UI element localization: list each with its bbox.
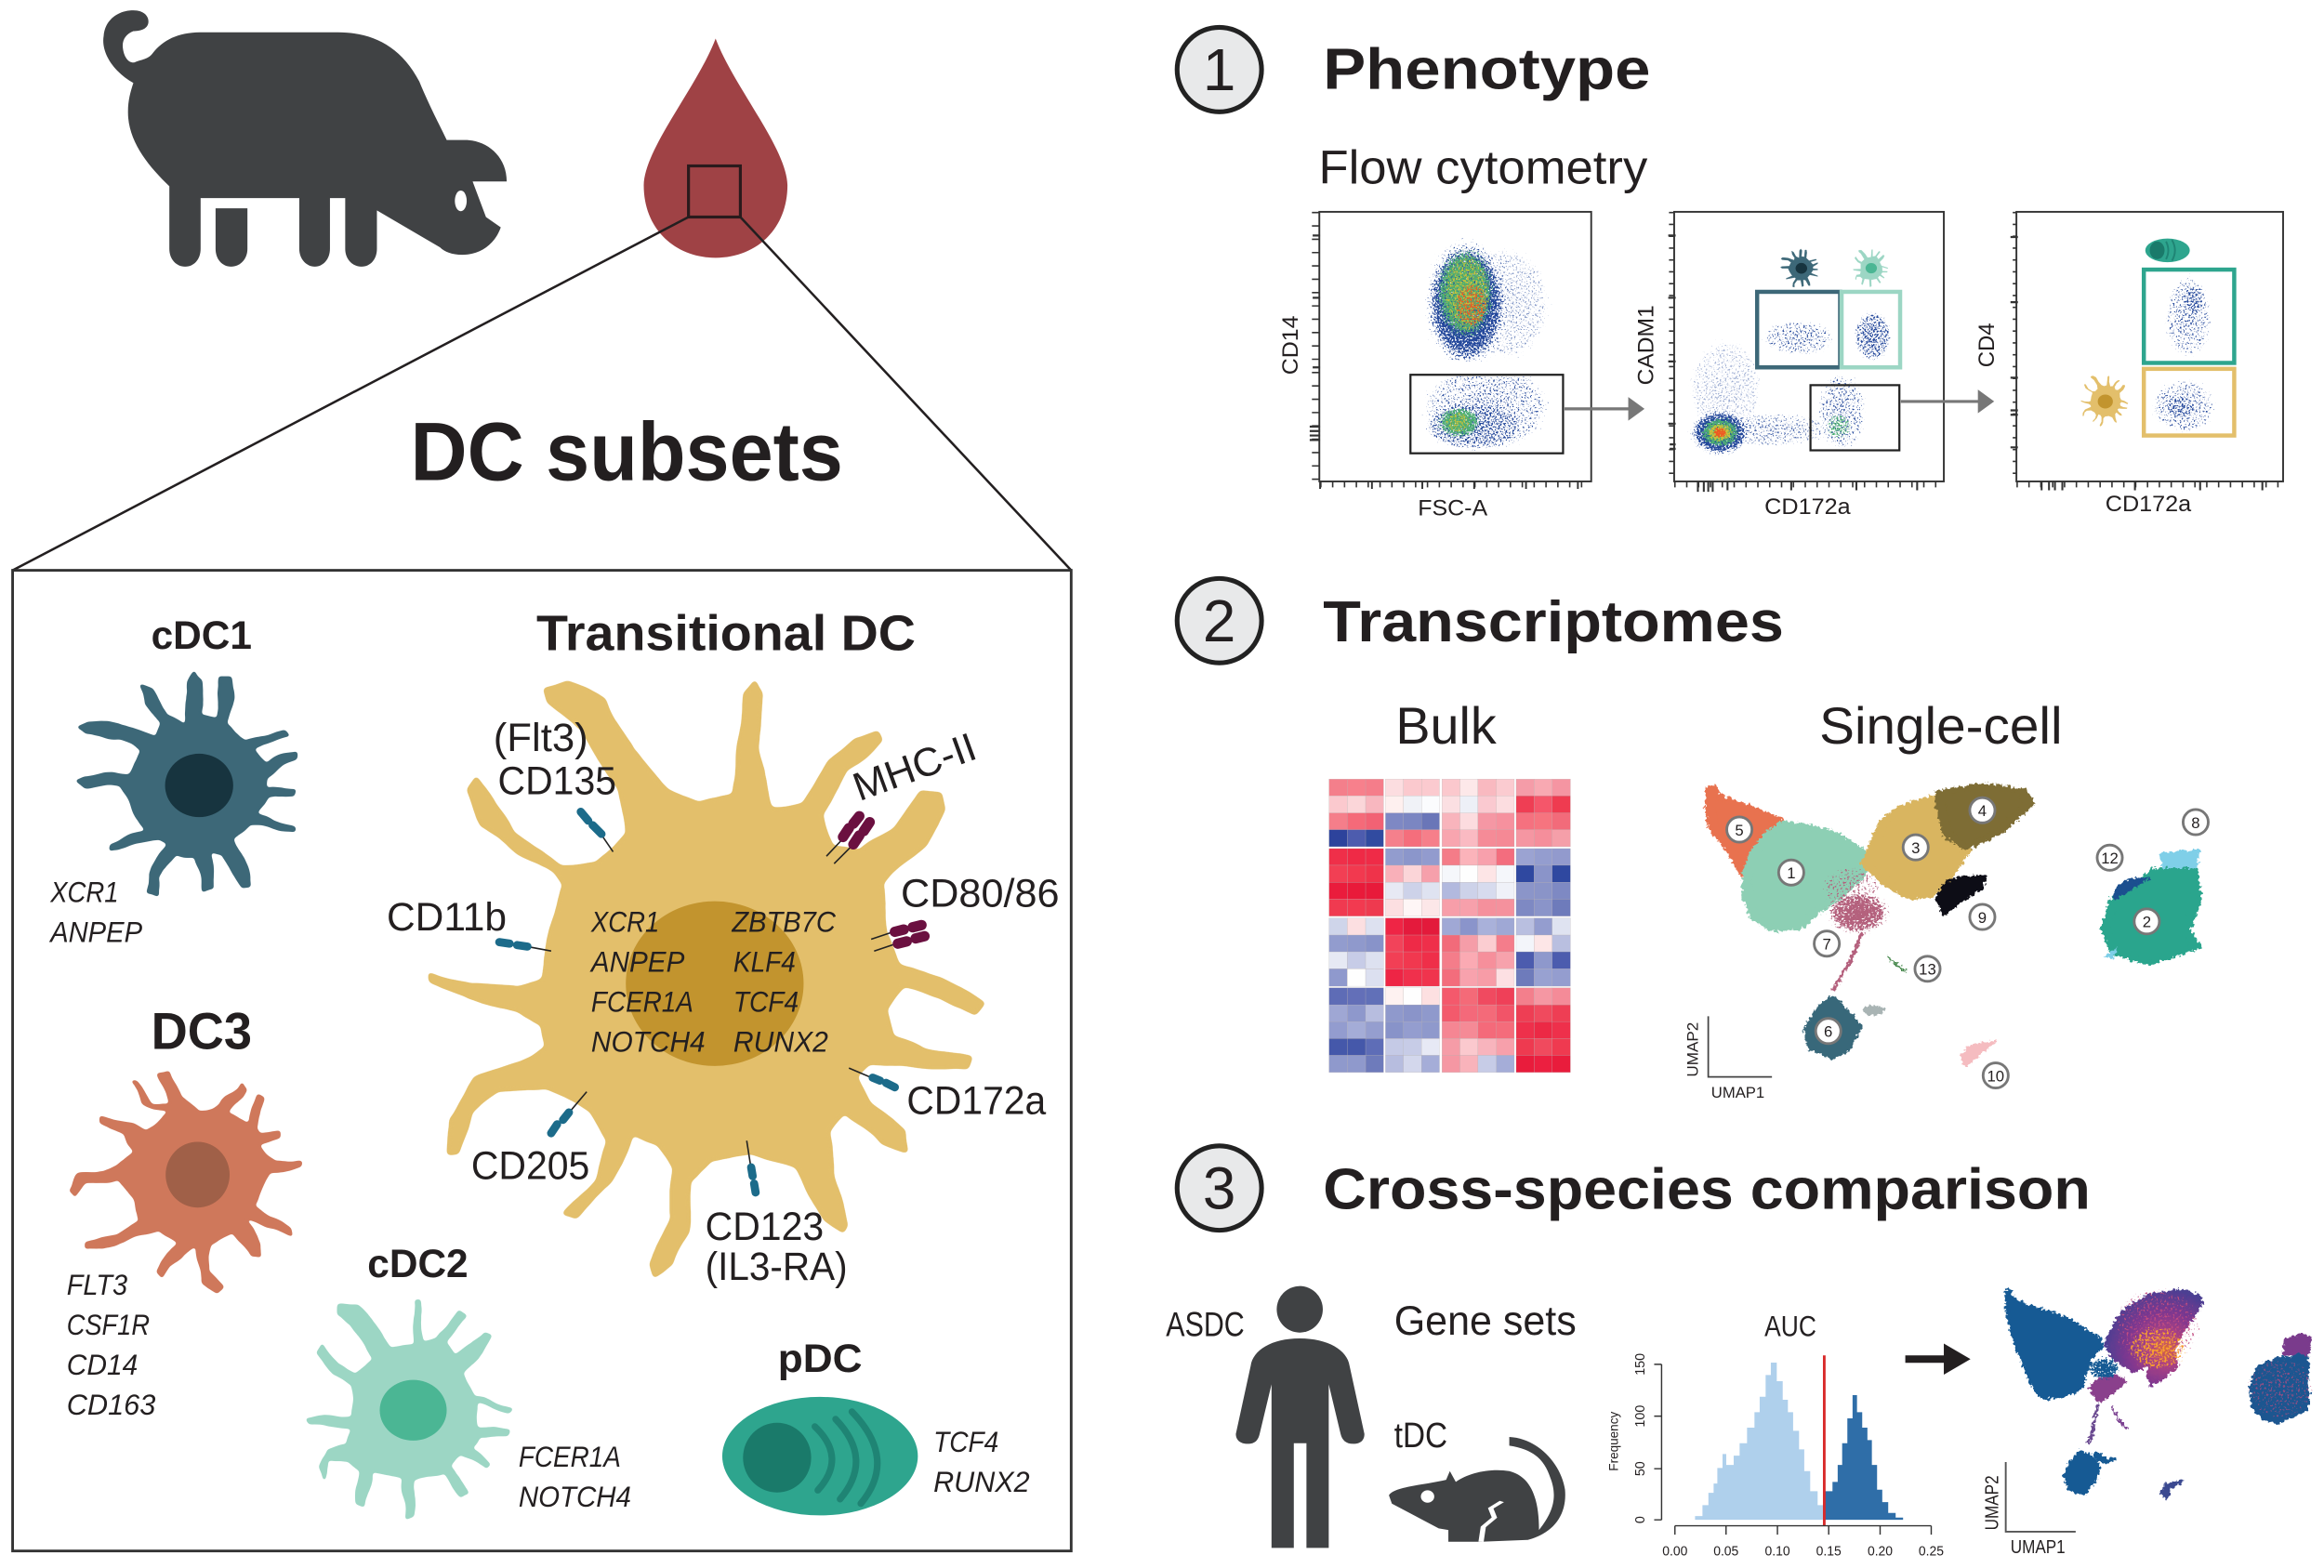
UMAP: cluster number badges xyxy=(1727,797,2209,1088)
x tick labels: 0.00 xyxy=(1662,1544,1687,1559)
label: CD205: CD205 xyxy=(471,1144,589,1189)
UMAP: cluster number badges: 9 xyxy=(1978,909,1987,927)
UMAP: cluster number badges: 3 xyxy=(1911,839,1920,857)
UMAP: cluster number badges: 6 xyxy=(1824,1023,1832,1041)
label: CD123 IL3-RA: (IL3-RA) xyxy=(706,1245,848,1289)
UMAP: cluster number badges: 8 xyxy=(2191,814,2200,832)
zoom lines xyxy=(13,217,1071,571)
axes xyxy=(1654,1364,1931,1535)
genes: cDC1 xyxy=(48,876,143,949)
x tick labels: 0.10 xyxy=(1765,1544,1790,1559)
badge: 1: 1 xyxy=(1203,36,1235,103)
icon: transitional DC small xyxy=(2081,376,2128,427)
badge: 3 xyxy=(1177,1146,1261,1231)
heading: cDC2: cDC2 xyxy=(367,1242,469,1286)
genes: transitional DC left: FCER1A xyxy=(591,985,693,1019)
icon: mouse xyxy=(1389,1437,1565,1542)
subheading: Bulk: Bulk xyxy=(1395,697,1497,755)
subheading: Single-cell: Single-cell xyxy=(1819,697,2063,755)
label: CD123 IL3-RA xyxy=(706,1205,848,1289)
genes: transitional DC left: ANPEP xyxy=(589,945,685,979)
x tick labels: 0.05 xyxy=(1713,1544,1738,1559)
icon: cDC2 cell xyxy=(307,1301,512,1520)
genes: pDC: TCF4 xyxy=(933,1425,998,1458)
y tick labels: 0 xyxy=(1633,1516,1648,1523)
UMAP axes: UMAP1 xyxy=(1711,1084,1764,1101)
label: CD11b: CD11b xyxy=(387,895,507,940)
genes: transitional DC right: KLF4 xyxy=(733,945,796,979)
genes: pDC xyxy=(933,1425,1030,1498)
y tick labels: 150 xyxy=(1633,1353,1648,1376)
threshold line xyxy=(1823,1355,1825,1526)
cell: DC3 xyxy=(67,1002,302,1421)
genes: DC3 xyxy=(67,1268,156,1421)
genes: transitional DC right: TCF4 xyxy=(733,985,799,1019)
x tick labels: 0.20 xyxy=(1868,1544,1893,1559)
UMAP axes overlay: UMAP2 xyxy=(1981,1475,2002,1530)
section 3: Cross-species comparison xyxy=(1166,1146,2321,1559)
genes: DC3: CD163 xyxy=(67,1388,156,1421)
label: Flt3 CD135 xyxy=(494,716,616,803)
label: AUC: AUC xyxy=(1764,1310,1816,1343)
icon: pDC small xyxy=(2146,239,2190,262)
icon: blood drop xyxy=(644,38,787,257)
UMAP: AUC overlay xyxy=(2006,1278,2321,1499)
genes: DC3: CSF1R xyxy=(67,1308,150,1341)
UMAP axes overlay xyxy=(1981,1462,2076,1558)
receptor: CD123 xyxy=(746,1140,756,1192)
heading: pDC: pDC xyxy=(778,1337,863,1381)
genes: transitional DC right: ZBTB7C xyxy=(731,904,837,938)
heatmap xyxy=(1329,779,1570,1073)
UMAP: cluster number badges: 13 xyxy=(1919,961,1936,979)
UMAP: clusters xyxy=(1710,785,2200,1065)
axis labels: CD4 xyxy=(1974,323,2000,367)
icon: DC3 cell xyxy=(70,1071,302,1292)
badge: 2: 2 xyxy=(1203,587,1235,654)
axis labels xyxy=(1974,323,2192,517)
UMAP axes overlay: UMAP1 xyxy=(2011,1536,2066,1558)
arrow: gate to plot 2 xyxy=(1565,397,1644,421)
axis labels: CD172a xyxy=(2106,492,2192,517)
zoom square on drop xyxy=(689,166,740,217)
label: MHC-II: MHC-II xyxy=(847,725,983,810)
gates xyxy=(2144,270,2234,436)
label: Flt3 CD135: (Flt3) xyxy=(494,716,588,760)
axis labels: FSC-A xyxy=(1418,496,1487,521)
y tick labels: 100 xyxy=(1633,1405,1648,1428)
section 2: Transcriptomes xyxy=(1177,578,2209,1101)
heading: DC3: DC3 xyxy=(152,1002,252,1060)
receptor: CD205 xyxy=(551,1092,587,1133)
UMAP: cluster number badges: 7 xyxy=(1822,936,1831,954)
subheading: Flow cytometry: Flow cytometry xyxy=(1318,141,1648,194)
axis labels xyxy=(1278,315,1487,521)
label: CD123 IL3-RA: CD123 xyxy=(706,1205,824,1249)
receptor: CD11b xyxy=(499,942,551,951)
axis labels xyxy=(1634,305,1851,520)
genes: transitional DC left: NOTCH4 xyxy=(591,1025,706,1059)
heading: cDC1: cDC1 xyxy=(152,613,252,658)
receptor: CD172a xyxy=(849,1068,895,1087)
badge: 2 xyxy=(1177,578,1261,663)
genes: transitional DC right: RUNX2 xyxy=(733,1025,828,1059)
label: CD172a: CD172a xyxy=(906,1079,1046,1124)
UMAP: cluster number badges: 10 xyxy=(1987,1067,2004,1085)
icon: cDC1 small xyxy=(1780,249,1817,287)
heading: Phenotype: Phenotype xyxy=(1323,38,1650,102)
arrow: gate to plot 3 xyxy=(1901,389,1994,414)
icon: pDC cell xyxy=(722,1397,918,1515)
axis labels: CD14 xyxy=(1278,315,1303,375)
genes: transitional DC right xyxy=(731,904,837,1059)
icon: cDC1 cell xyxy=(77,671,295,896)
flow plot 1 xyxy=(1278,212,1591,521)
UMAP: cluster number badges: 12 xyxy=(2101,850,2119,867)
label: Gene sets: Gene sets xyxy=(1394,1298,1577,1344)
label: CD80/86: CD80/86 xyxy=(901,871,1060,916)
heading: DC subsets: DC subsets xyxy=(410,404,843,497)
axis labels: CD172a xyxy=(1764,494,1851,520)
genes: cDC1: ANPEP xyxy=(48,916,143,949)
genes: cDC2: FCER1A xyxy=(519,1440,621,1473)
UMAP: cluster number badges: 2 xyxy=(2143,914,2151,931)
y tick labels: Frequency xyxy=(1606,1412,1620,1471)
cell: pDC xyxy=(722,1337,1030,1515)
heading: Transcriptomes: Transcriptomes xyxy=(1323,590,1784,654)
x tick labels: 0.15 xyxy=(1816,1544,1842,1559)
flow plot 3 xyxy=(1974,212,2283,517)
arrow: AUC to UMAP xyxy=(1906,1344,1971,1375)
heading: Transitional DC: Transitional DC xyxy=(536,606,916,662)
genes: cDC2 xyxy=(519,1440,631,1513)
icon: pig xyxy=(103,10,507,267)
genes: transitional DC left xyxy=(589,904,706,1059)
histogram xyxy=(1606,1353,1944,1559)
cell: cDC2 xyxy=(307,1242,631,1520)
badge: 3: 3 xyxy=(1203,1155,1235,1222)
x tick labels: 0.25 xyxy=(1919,1544,1944,1559)
gates xyxy=(1757,292,1900,451)
receptor: CD80/86 xyxy=(871,925,925,951)
icon: human xyxy=(1235,1286,1365,1548)
UMAP axes xyxy=(1684,1016,1772,1101)
UMAP: cluster number badges: 1 xyxy=(1787,864,1796,882)
heading: Cross-species comparison: Cross-species comparison xyxy=(1323,1158,2091,1222)
label: tDC: tDC xyxy=(1394,1416,1447,1456)
genes: DC3: CD14 xyxy=(67,1348,138,1381)
axis labels: CADM1 xyxy=(1634,305,1659,385)
y tick labels: 50 xyxy=(1633,1461,1648,1476)
cell: Transitional DC xyxy=(387,606,1060,1289)
flow plot 2 xyxy=(1634,212,1944,520)
section 1: Phenotype xyxy=(1177,27,2283,521)
receptor: CD135 xyxy=(581,811,614,851)
genes: cDC1: XCR1 xyxy=(49,876,119,909)
UMAP: cluster number badges: 5 xyxy=(1735,822,1744,839)
icon: cDC2 small xyxy=(1854,250,1888,287)
UMAP axes: UMAP2 xyxy=(1684,1022,1701,1077)
gate xyxy=(1410,375,1563,454)
panel: DC subsets box xyxy=(13,571,1071,1551)
label: ASDC: ASDC xyxy=(1166,1306,1245,1344)
genes: transitional DC left: XCR1 xyxy=(590,904,659,938)
genes: cDC2: NOTCH4 xyxy=(519,1480,631,1513)
cell: cDC1 xyxy=(48,613,295,949)
UMAP: cluster number badges: 4 xyxy=(1978,802,1987,820)
label: Flt3 CD135: CD135 xyxy=(498,758,616,803)
y tick labels xyxy=(1606,1353,1648,1523)
genes: pDC: RUNX2 xyxy=(933,1465,1030,1498)
icon: transitional DC cell xyxy=(430,682,982,1275)
receptor: MHC-II xyxy=(826,816,870,863)
badge: 1 xyxy=(1177,27,1261,112)
x tick labels xyxy=(1662,1544,1944,1559)
genes: DC3: FLT3 xyxy=(67,1268,127,1301)
